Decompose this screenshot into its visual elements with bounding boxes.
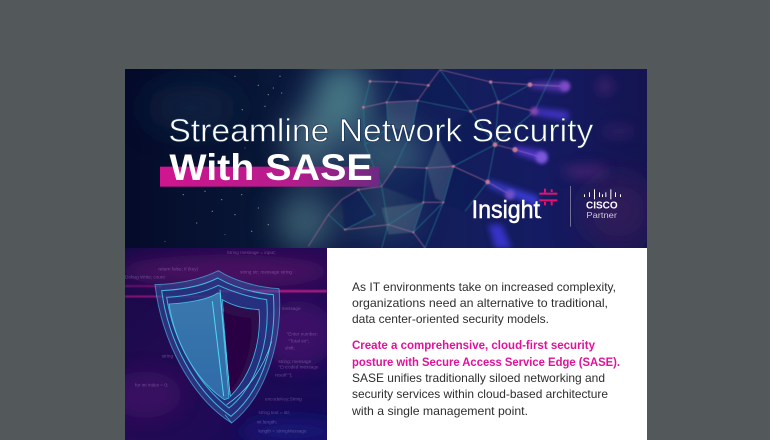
code background: "Total str"; bbox=[288, 339, 309, 344]
panel: shield image bbox=[125, 248, 327, 440]
code background: string str; message string bbox=[240, 269, 292, 274]
divider bbox=[569, 186, 572, 227]
dark facets bbox=[342, 70, 495, 230]
text block: SASE description bbox=[351, 371, 608, 418]
code background: encodeKey;String bbox=[265, 397, 302, 402]
title bbox=[168, 112, 593, 188]
logo: Insight bbox=[472, 189, 557, 224]
text block: callout in magenta: posture with Secure Access Service Edge (SASE). bbox=[352, 355, 620, 369]
network mesh bbox=[308, 68, 565, 248]
code background: for int index = 0; bbox=[135, 382, 168, 387]
logo: Cisco Partner bbox=[584, 189, 621, 220]
text block: intro paragraph: data center-oriented security models. bbox=[352, 312, 549, 326]
icon: layered shield bbox=[155, 271, 280, 423]
code background: shift; bbox=[285, 345, 295, 350]
code background: String message = input; bbox=[227, 250, 276, 255]
text block: callout in magenta: Create a comprehensive, cloud-first security bbox=[352, 338, 595, 352]
code background: "Encoded message bbox=[278, 365, 319, 370]
title: Streamline Network Security bbox=[168, 112, 593, 148]
panel: hero banner bbox=[125, 69, 647, 248]
text block: SASE description: security services within cloud-based architecture bbox=[352, 387, 608, 401]
text block: intro paragraph bbox=[352, 280, 616, 326]
code background: string; message bbox=[278, 359, 312, 364]
code background: string bbox=[162, 353, 173, 358]
code background: message bbox=[282, 306, 301, 311]
panel: document cover bbox=[125, 69, 647, 440]
code background: Debug Write; count bbox=[125, 275, 165, 280]
light streaks bbox=[488, 81, 568, 248]
text block: SASE description: with a single management point. bbox=[351, 404, 528, 418]
magenta scan line bbox=[125, 285, 327, 297]
text block: SASE description: SASE unifies traditionally siloed networking and bbox=[352, 371, 605, 385]
logo: Cisco Partner: Partner bbox=[586, 210, 617, 220]
title: With SASE bbox=[169, 147, 373, 188]
logo: Cisco Partner: CISCO bbox=[586, 201, 618, 212]
code background: result""); bbox=[275, 372, 293, 377]
code background: string text = str; bbox=[258, 410, 290, 415]
code background: return false; if (key) bbox=[158, 267, 199, 272]
text block: intro paragraph: organizations need an alternative to traditional, bbox=[352, 296, 608, 310]
code background: "Enter number: bbox=[287, 331, 318, 336]
text block: intro paragraph: As IT environments take on increased complexity, bbox=[352, 280, 616, 294]
cloud haze bbox=[145, 61, 655, 251]
panel: intro text bbox=[182, 278, 620, 420]
stars bbox=[164, 76, 282, 242]
logo: Insight: Insight bbox=[472, 196, 540, 224]
code background: length = stringMessage bbox=[258, 428, 307, 433]
text block: callout in magenta bbox=[352, 338, 620, 369]
accent bar bbox=[160, 167, 379, 187]
code background bbox=[125, 250, 319, 433]
code background: int length; bbox=[257, 420, 277, 425]
